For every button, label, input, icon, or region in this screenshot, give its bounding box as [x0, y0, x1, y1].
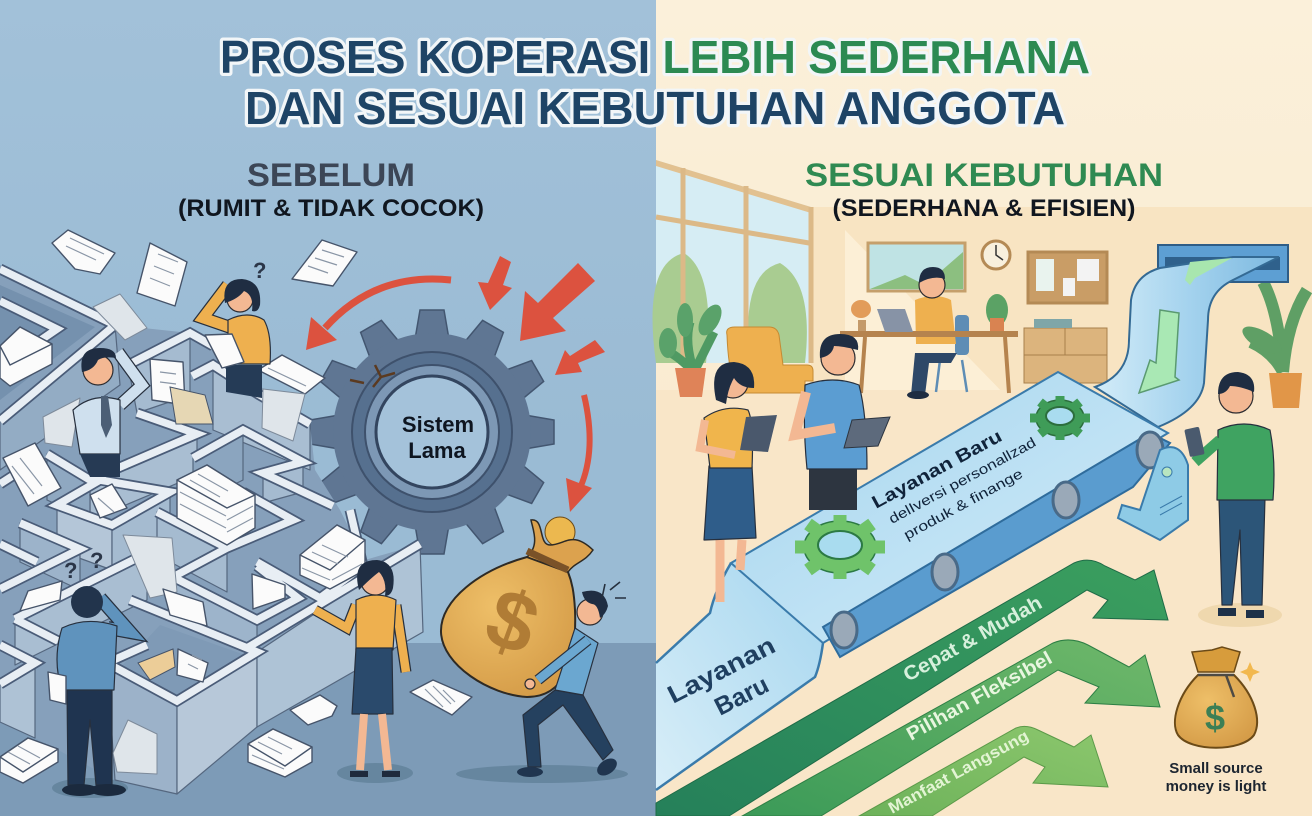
- money bag: large: [441, 517, 593, 697]
- maze walls: [0, 265, 423, 794]
- belt label: layanan baru upper: Layanan Baru: [868, 426, 1005, 513]
- red arrows: [306, 256, 605, 512]
- title: PROSES KOPERASI LEBIH SEDERHANA: [220, 31, 1090, 83]
- money bag: small: $: [1205, 697, 1225, 738]
- wall decorations: [868, 241, 1107, 303]
- belt label: layanan baru lower: Layanan: [663, 631, 780, 709]
- belt label: layanan baru upper: [868, 426, 1038, 543]
- green arrow: manfaat langsung: [859, 726, 1108, 816]
- desk, cabinet and worker: [840, 267, 1107, 399]
- green arrow: cepat & mudah: [656, 560, 1168, 816]
- gear label: Sistem: [402, 412, 474, 437]
- belt label: layanan baru lower: [663, 631, 780, 721]
- person: stressed man bottom left: [48, 548, 130, 796]
- scattered papers: [3, 230, 472, 774]
- conveyor belt: [656, 245, 1288, 790]
- person: woman in skirt: [315, 560, 406, 774]
- arrow label: Manfaat Langsung: [886, 728, 1032, 816]
- belt label: layanan baru upper: produk & finange: [901, 465, 1026, 543]
- panel: sebelum background: [0, 0, 656, 816]
- money bag: small: [1175, 647, 1260, 748]
- title: DAN SESUAI KEBUTUHAN ANGGOTA: [245, 82, 1065, 134]
- armchair and plants: [659, 282, 1307, 408]
- subheading: sesuai kebutuhan: SESUAI KEBUTUHAN: [805, 157, 1163, 193]
- panel: sesuai kebutuhan background: [656, 0, 1312, 816]
- caption: small money: money is light: [1166, 778, 1266, 795]
- person: man in green with phone: [1184, 372, 1282, 627]
- person: woman with document: ?: [253, 258, 266, 283]
- arrow label: Pilihan Fleksibel: [903, 648, 1056, 745]
- gear icons on belt: [795, 396, 1090, 579]
- person: man with tablet: [795, 334, 890, 510]
- title: [220, 31, 1090, 134]
- caption: small money: [1166, 760, 1266, 795]
- green arrow: pilihan fleksibel: [742, 640, 1160, 816]
- person: stressed man top left: [73, 348, 142, 477]
- arrow label: Cepat & Mudah: [900, 592, 1046, 686]
- subheading: sesuai kebutuhan: [805, 157, 1163, 222]
- subheading: sebelum: [178, 157, 484, 222]
- belt label: layanan baru lower: Baru: [710, 671, 773, 721]
- paper stacks: [0, 327, 365, 783]
- gear label: Lama: [408, 438, 466, 463]
- gear label: [402, 412, 474, 463]
- gear: sistem lama: [310, 310, 554, 554]
- person: stressed man bottom left: ?: [90, 548, 103, 573]
- caption: small money: Small source: [1169, 760, 1263, 777]
- subheading: sesuai kebutuhan: (SEDERHANA & EFISIEN): [832, 195, 1136, 222]
- money bag: large: $: [474, 569, 550, 673]
- subheading: sebelum: SEBELUM: [247, 157, 415, 193]
- subheading: sebelum: (RUMIT & TIDAK COCOK): [178, 195, 484, 222]
- window: [652, 160, 811, 363]
- person: woman with tablet: [700, 362, 777, 602]
- person: stressed man bottom left: ?: [64, 558, 77, 583]
- person: man carrying bag: [517, 582, 626, 779]
- person: woman with document: [203, 258, 270, 398]
- belt label: layanan baru upper: delIversi personallzad: [886, 434, 1038, 527]
